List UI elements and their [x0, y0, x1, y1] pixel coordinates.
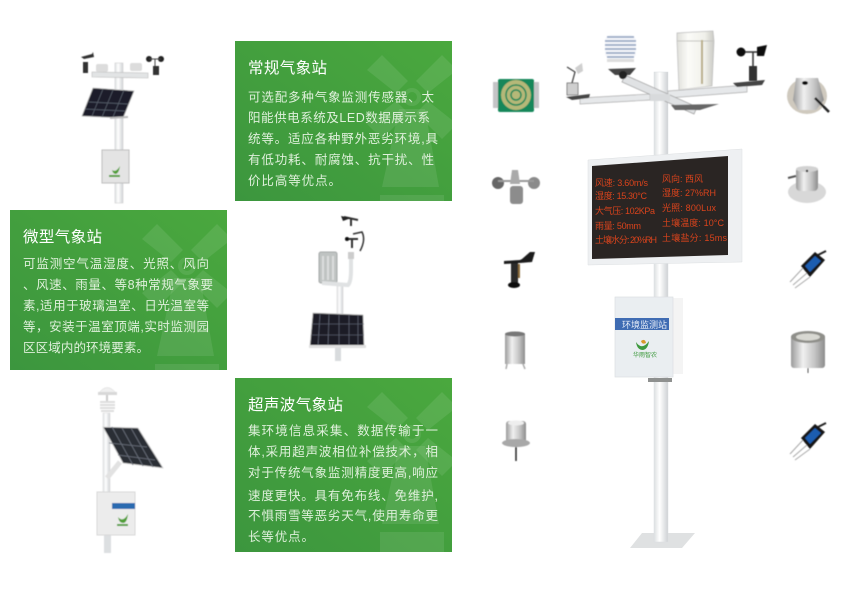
LED display	[588, 149, 742, 265]
icon: ultrasonic weather station	[97, 388, 163, 553]
icon: main monitoring station	[566, 31, 767, 548]
LED display: 光照: 800Lux	[662, 202, 716, 213]
LED display: 土壤盐分: 15ms	[662, 232, 728, 243]
LED display: 湿度: 15.30°C	[595, 190, 648, 201]
heading: 超声波气象站: 超声波气象站	[248, 396, 343, 414]
text block: 微型气象站 description: 区区域内的环境要素。	[23, 340, 149, 355]
text block: 常规气象站 description: 阳能供电系统及LED数据展示系	[248, 110, 430, 125]
text block: 微型气象站 description: 可监测空气温湿度、光照、风向	[23, 256, 209, 271]
anemometer	[736, 45, 767, 81]
icon: radiation sensor	[787, 78, 829, 114]
text block: 微型气象站 description: 素,适用于玻璃温室、日光温室等	[23, 298, 209, 313]
text block: 超声波气象站 description: 不惧雨雪等恶劣天气,使用寿命更	[248, 508, 438, 523]
text block: 常规气象站 description: 统等。适应各种野外恶劣环境,具	[248, 131, 438, 146]
LED display: 风向: 西风	[662, 173, 703, 184]
icon: wind direction sensor	[504, 252, 535, 288]
text block: 超声波气象站 description: 体,采用超声波相位补偿技术，相	[248, 444, 438, 459]
icon: conventional weather station	[81, 52, 164, 203]
control box: 环境监测站	[622, 319, 667, 330]
panel: 超声波气象站	[235, 378, 457, 554]
rain gauge	[677, 31, 714, 90]
icon: soil sensor cylinder	[791, 331, 825, 373]
text block: 常规气象站 description	[248, 90, 438, 188]
text block: 超声波气象站 description	[248, 423, 438, 544]
icon: soil probe lower	[790, 423, 826, 460]
LED display: 土壤水分: 20%RH	[595, 234, 657, 245]
text block: 微型气象站 description: 等，安装于温室顶端,实时监测园	[23, 319, 209, 334]
panel: 微型气象站	[10, 210, 227, 370]
icon: wind speed sensor	[492, 170, 540, 204]
heading: 微型气象站: 微型气象站	[23, 228, 102, 246]
LED display: 雨量: 50mm	[595, 221, 641, 231]
wind vane	[567, 63, 583, 95]
LED display: 土壤温度: 10°C	[662, 217, 724, 228]
text block: 微型气象站 description	[23, 256, 213, 355]
control box: 华雨智农	[633, 351, 657, 359]
text block: 超声波气象站 description: 长等优点。	[248, 529, 314, 544]
icon: pressure sensor	[502, 420, 530, 461]
LED display: 湿度: 27%RH	[662, 187, 716, 198]
icon: soil probe upper	[790, 251, 826, 288]
text block: 超声波气象站 description: 集环境信息采集、数据传输于一	[248, 423, 438, 438]
icon: illuminance sensor	[788, 166, 826, 203]
pole	[654, 72, 668, 542]
text block: 微型气象站 description: 、风速、雨量、等8种常规气象要	[23, 277, 213, 292]
control box	[615, 297, 683, 382]
radiation shield	[605, 35, 636, 62]
crossarms	[566, 68, 765, 114]
icon: rain gauge sensor	[505, 332, 525, 369]
icon: micro weather station	[309, 216, 366, 361]
text block: 超声波气象站 description: 速度更快。具有免布线、免维护,	[248, 488, 438, 503]
LED display: 风速: 3.60m/s	[595, 178, 648, 188]
text block: 常规气象站 description: 可选配多种气象监测传感器、太	[248, 90, 434, 104]
heading: 常规气象站: 常规气象站	[248, 59, 327, 77]
base plate	[630, 533, 695, 548]
LED display: 大气压: 102KPa	[595, 205, 655, 216]
icon: noise sensor	[493, 79, 539, 112]
text block: 常规气象站 description: 价比高等优点。	[248, 173, 341, 188]
text block: 常规气象站 description: 有低功耗、耐腐蚀、抗干扰、性	[248, 152, 434, 167]
text block: 超声波气象站 description: 对于传统气象监测精度更高,响应	[248, 465, 438, 480]
panel: 常规气象站	[235, 41, 452, 201]
